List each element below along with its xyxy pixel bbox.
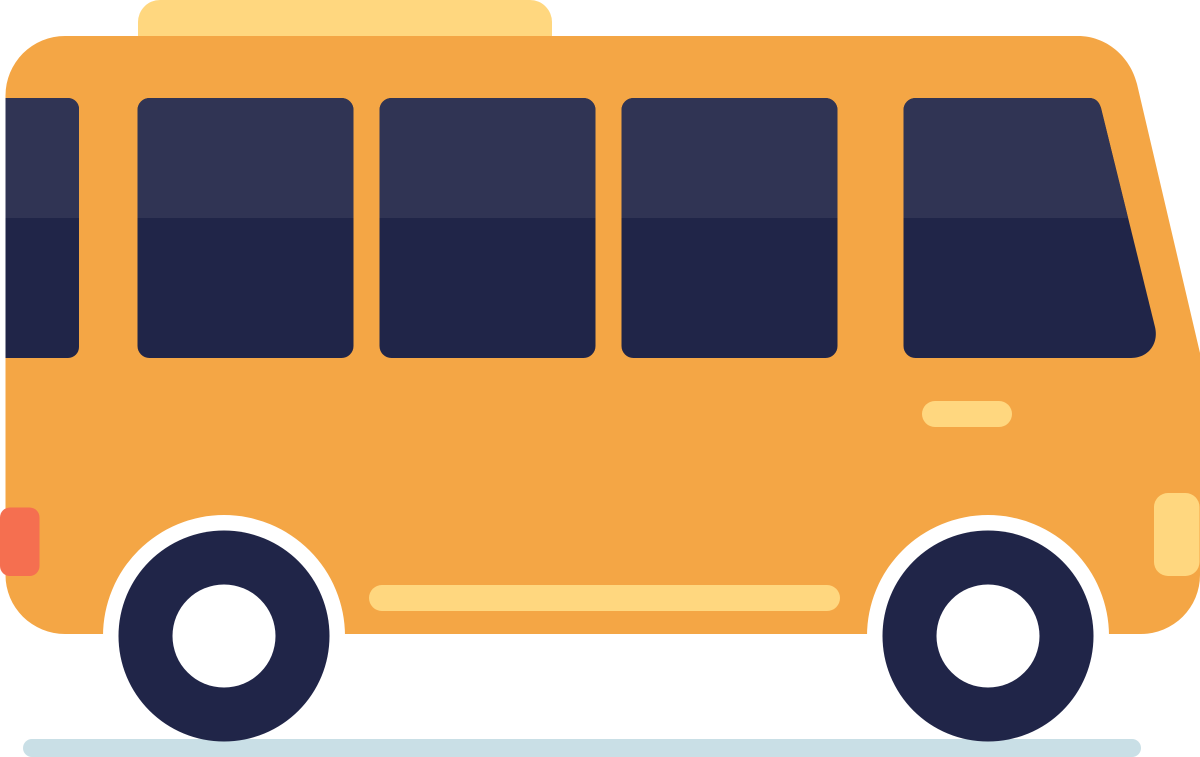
window 2 [380,98,596,358]
window 3 [622,98,838,358]
rear wheel [103,515,345,742]
tail light [0,508,40,576]
bus body [6,36,1200,634]
rear window [6,98,79,358]
ground shadow [23,739,1141,757]
window 1 [138,98,354,358]
front wheel [867,515,1109,742]
door handle [922,401,1012,427]
headlight [1154,493,1200,576]
front window [904,98,1156,358]
roof rack [138,0,552,40]
side stripe [369,585,840,611]
